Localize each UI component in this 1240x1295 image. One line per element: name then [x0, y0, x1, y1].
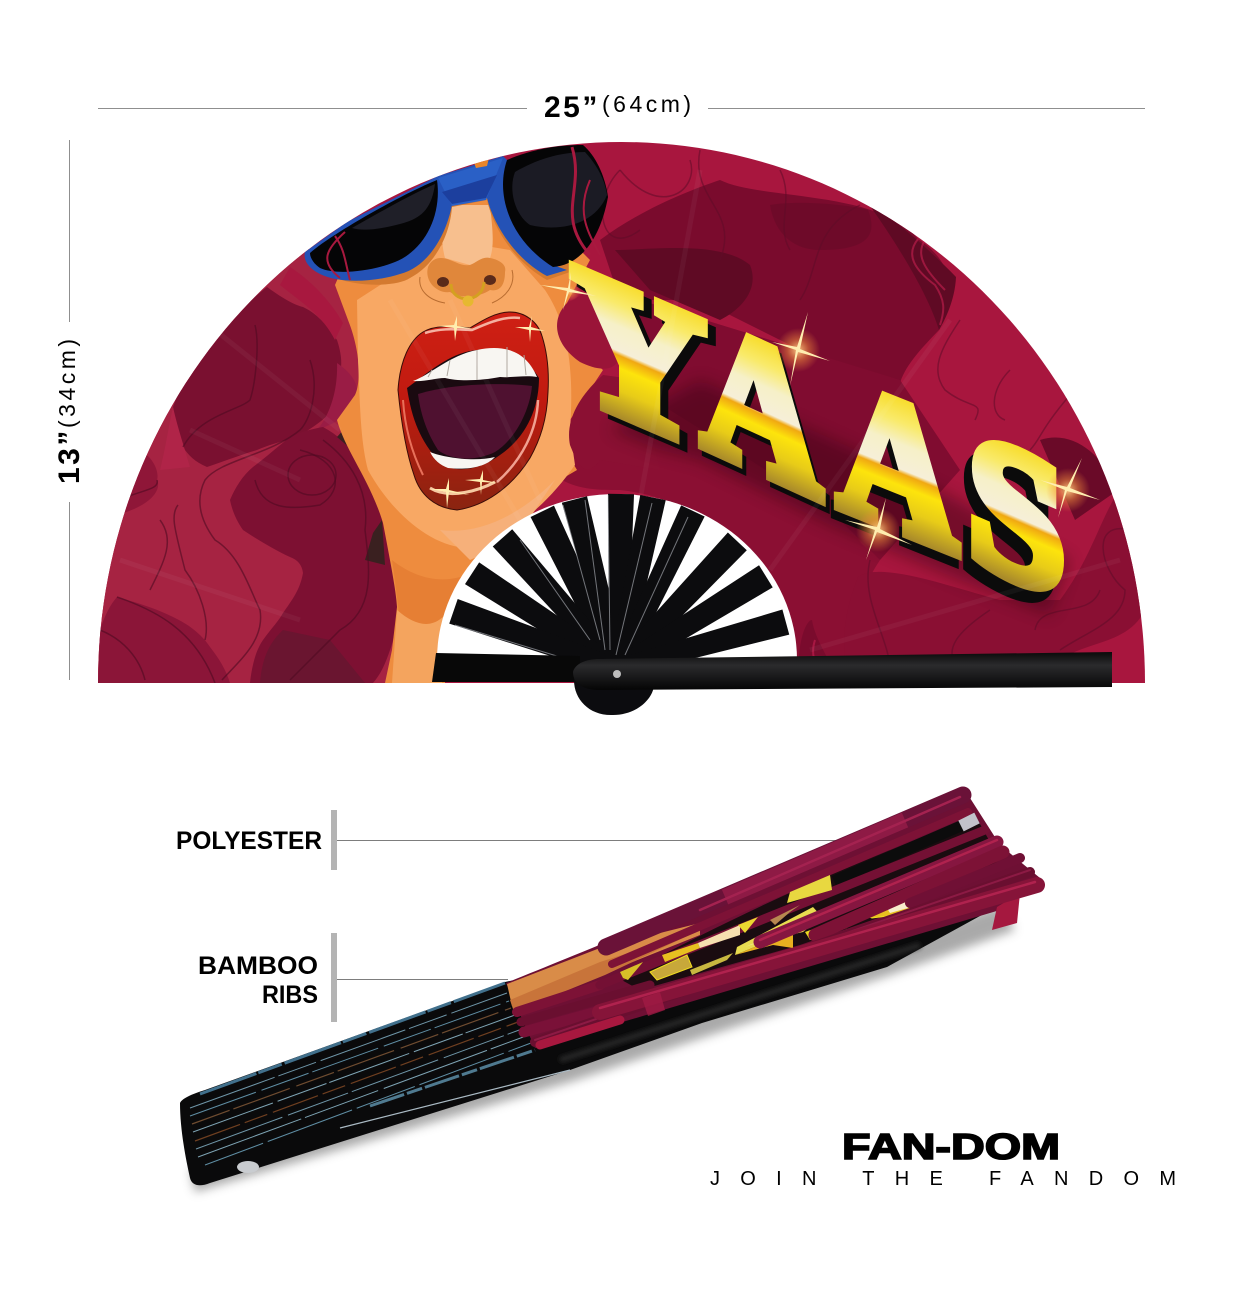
rib highlights [455, 495, 688, 660]
extrusion: A [835, 344, 954, 602]
left guard stick [432, 653, 580, 682]
gold faces: A [838, 336, 957, 594]
width dimension: 25 inches: 25” [544, 91, 600, 124]
white cutout between ribs [437, 494, 797, 660]
black handle [180, 905, 1000, 1185]
crimson tip of lower panel [992, 893, 1020, 930]
neck tones [392, 480, 555, 683]
pivot hub [574, 670, 654, 715]
extrusion [576, 283, 1054, 603]
fabric fold streaks [120, 170, 1120, 650]
height dimension: 13 inches: 13” [53, 428, 86, 484]
lips [398, 312, 548, 510]
crimson panel block [642, 992, 665, 1016]
mouth [398, 312, 548, 510]
pivot pin [613, 670, 621, 678]
folded fabric base [506, 787, 1040, 1048]
right hair locks over face [557, 290, 621, 369]
gold faces: A [702, 275, 821, 540]
bamboo ribs label: RIBS [262, 981, 318, 1009]
bamboo ribs label [198, 933, 508, 1022]
right guard stick [573, 652, 1112, 690]
width dimension: 25 inches [98, 91, 1145, 124]
yellow letter fragments [620, 875, 925, 980]
sparkles [430, 272, 1100, 560]
polyester label: POLYESTER [176, 827, 322, 855]
gold faces [568, 260, 1064, 592]
gold faces: Y [572, 224, 705, 491]
handle rib highlights [190, 945, 920, 1165]
drop shadow [190, 905, 1015, 1192]
fan fabric with hair artwork [90, 135, 1150, 695]
brand wordmark: FAN-DOM [842, 1126, 1060, 1167]
height dimension: 13 inches [53, 140, 86, 680]
brand tagline: JOIN THE FANDOM [710, 1168, 1176, 1190]
nose [420, 205, 513, 303]
soft shadow [610, 380, 1070, 615]
YAAS lettering [568, 260, 1074, 618]
bamboo ribs radial [449, 494, 789, 681]
pin [237, 1161, 259, 1173]
extrusion: A [706, 282, 825, 547]
closed fan [180, 787, 1040, 1192]
lower teeth [430, 452, 495, 469]
gold faces: S [968, 389, 1065, 641]
open fan [90, 135, 1150, 715]
nose ring [451, 282, 484, 306]
extrusion: Y [580, 232, 713, 499]
extrusion: S [960, 400, 1057, 652]
mouth cavity [407, 349, 539, 469]
bamboo ribs label: BAMBOO [198, 952, 318, 980]
lighter skin area [357, 240, 575, 548]
skin-coloured fold [507, 923, 700, 1006]
polyester label [176, 810, 855, 870]
upper teeth [413, 348, 537, 381]
hair: left shades [98, 230, 400, 690]
width dimension: 25 inches: (64cm) [602, 91, 695, 117]
brand wordmark [710, 1126, 1176, 1190]
face skin [335, 170, 603, 683]
gap between folds [618, 815, 1000, 990]
height dimension: 13 inches: (34cm) [54, 335, 80, 428]
sunglasses [305, 145, 608, 285]
hair: right shades [562, 150, 1145, 683]
middle and lower crimson ribs [535, 840, 1037, 1045]
upper crimson ribs [517, 795, 985, 1032]
